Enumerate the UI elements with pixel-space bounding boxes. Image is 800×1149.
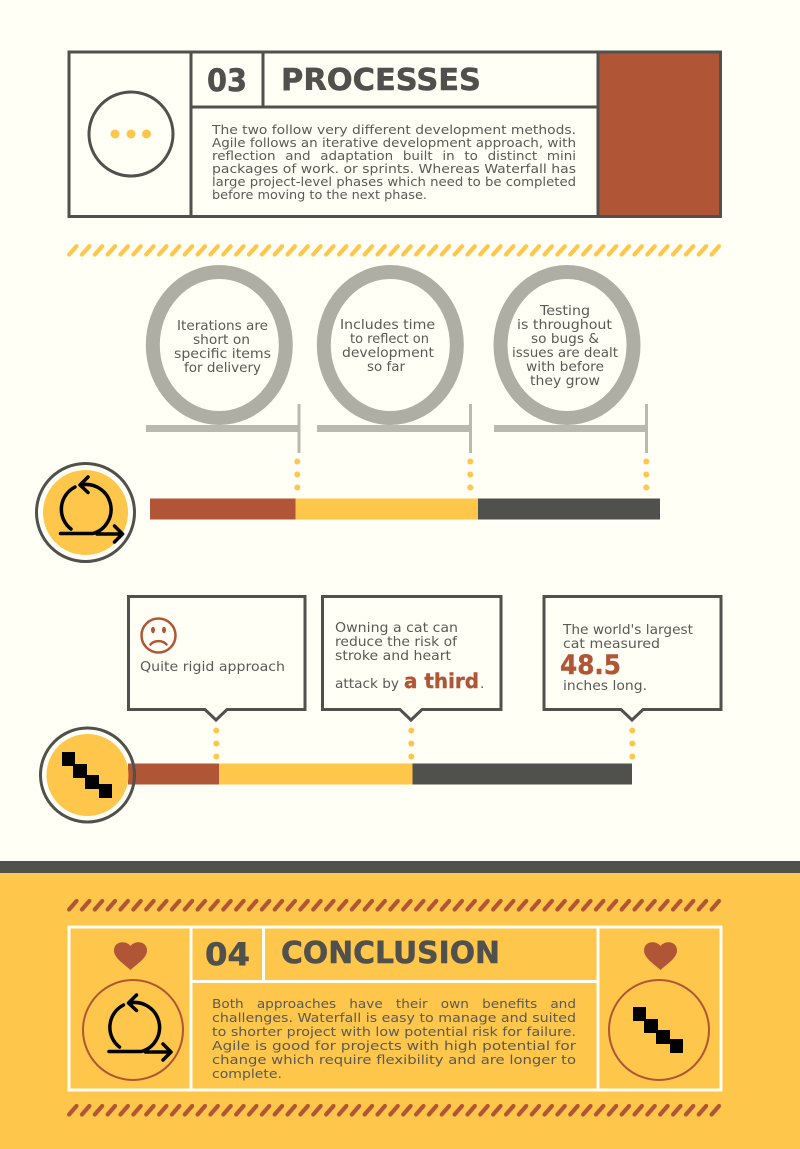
callout: cat stroke risk	[322, 596, 501, 720]
panel: conclusion background	[0, 861, 800, 1149]
callout text	[335, 621, 484, 693]
callout text: is throughout	[517, 318, 612, 333]
conclusion body text: Agile is good for projects with high potential for	[212, 1038, 577, 1053]
callout text: specific items	[174, 347, 271, 362]
processes body text: reflection and adaptation built in to distinct mini	[212, 148, 576, 163]
callout text: stroke and heart	[335, 649, 451, 664]
icon: ellipsis circle	[89, 92, 173, 176]
conclusion body text: complete.	[212, 1066, 282, 1081]
processes body text: before moving to the next phase.	[212, 187, 427, 202]
callout text: reduce the risk of	[335, 635, 457, 650]
callout text: so far	[367, 360, 405, 375]
processes body text: Agile follows an iterative development approach, with	[212, 135, 576, 150]
callout: largest cat	[544, 596, 721, 720]
callout text: Testing	[539, 304, 590, 319]
panel: agile callout 3	[494, 272, 648, 453]
panel: agile callout 2	[317, 272, 472, 453]
bracket tick	[298, 404, 300, 453]
icon: left heart	[114, 942, 147, 970]
ring	[500, 272, 634, 418]
callout text: issues are dealt	[512, 346, 618, 361]
callout text: The world's largest	[562, 623, 693, 638]
callout text: Includes time	[340, 318, 435, 333]
callout text: a third	[404, 669, 479, 693]
striped divider	[66, 897, 722, 913]
callout text	[174, 319, 271, 376]
conclusion body text: to shorter project with low potential risk for failure.	[212, 1024, 576, 1039]
callout text: Quite rigid approach	[140, 660, 285, 675]
striped divider	[66, 1102, 722, 1118]
speech bubble	[128, 596, 305, 720]
striped divider	[66, 243, 722, 258]
callout text: Owning a cat can	[335, 621, 458, 636]
conclusion body text: challenges. Waterfall is easy to manage and suited	[212, 1010, 576, 1025]
section number 03: 03	[207, 63, 247, 99]
callout text: 48.5	[560, 650, 621, 681]
callout text: inches long.	[563, 679, 647, 694]
icon: agile loop badge	[36, 464, 134, 562]
conclusion body text: Both approaches have their own benefits and	[212, 996, 576, 1011]
panel frame and dividers	[69, 927, 721, 1090]
callout text: .	[480, 677, 484, 692]
callout text: short on	[193, 333, 250, 348]
panel: conclusion	[69, 927, 721, 1090]
bracket tick	[469, 404, 472, 453]
callout text: attack by	[335, 677, 399, 692]
icon: waterfall in circle	[609, 980, 709, 1080]
callout text	[340, 318, 435, 375]
callout text: cat measured	[563, 637, 660, 652]
callout text	[560, 623, 693, 694]
callout text: so bugs &	[531, 332, 600, 347]
callout text	[512, 304, 618, 389]
conclusion body text: change which require flexibility and are longer to	[212, 1052, 576, 1067]
agile timeline bar	[150, 498, 660, 520]
speech bubble	[322, 596, 501, 720]
panel frame and dividers	[69, 52, 720, 216]
bracket bar	[146, 425, 298, 432]
processes body text: large project-level phases which need to be completed	[212, 174, 576, 189]
waterfall timeline bar	[128, 764, 632, 784]
processes body text	[211, 122, 576, 202]
icon: sad face	[142, 618, 176, 652]
callout text: Iterations are	[177, 319, 268, 334]
callout text: to reflect on	[350, 332, 429, 347]
conclusion body text	[212, 996, 577, 1081]
processes body text: The two follow very different development methods.	[211, 122, 576, 137]
section number 04: 04	[205, 937, 250, 973]
heading: conclusion: CONCLUSION	[281, 936, 500, 971]
ring	[324, 272, 457, 418]
callout text: for delivery	[184, 361, 261, 376]
callout text: development	[342, 346, 434, 361]
connector dots: waterfall timeline	[213, 728, 635, 760]
processes body text: packages of work. or sprints. Whereas Waterfall has	[212, 161, 576, 176]
panel: agile callout 1	[146, 272, 300, 453]
connector dots: agile timeline	[294, 458, 649, 490]
callout: quite rigid approach	[128, 596, 305, 720]
heading: processes: PROCESSES	[281, 63, 481, 98]
ring	[153, 272, 286, 418]
panel: processes header	[69, 51, 721, 217]
bracket tick	[645, 404, 648, 453]
speech bubble	[544, 596, 721, 720]
callout text: with before	[526, 360, 604, 375]
icon: agile loop in circle	[83, 980, 183, 1080]
icon: right heart	[644, 942, 677, 970]
brown accent block	[598, 51, 721, 217]
icon: waterfall badge	[40, 728, 134, 822]
callout text: they grow	[530, 374, 600, 389]
bracket bar	[317, 425, 470, 432]
bracket bar	[494, 425, 646, 432]
